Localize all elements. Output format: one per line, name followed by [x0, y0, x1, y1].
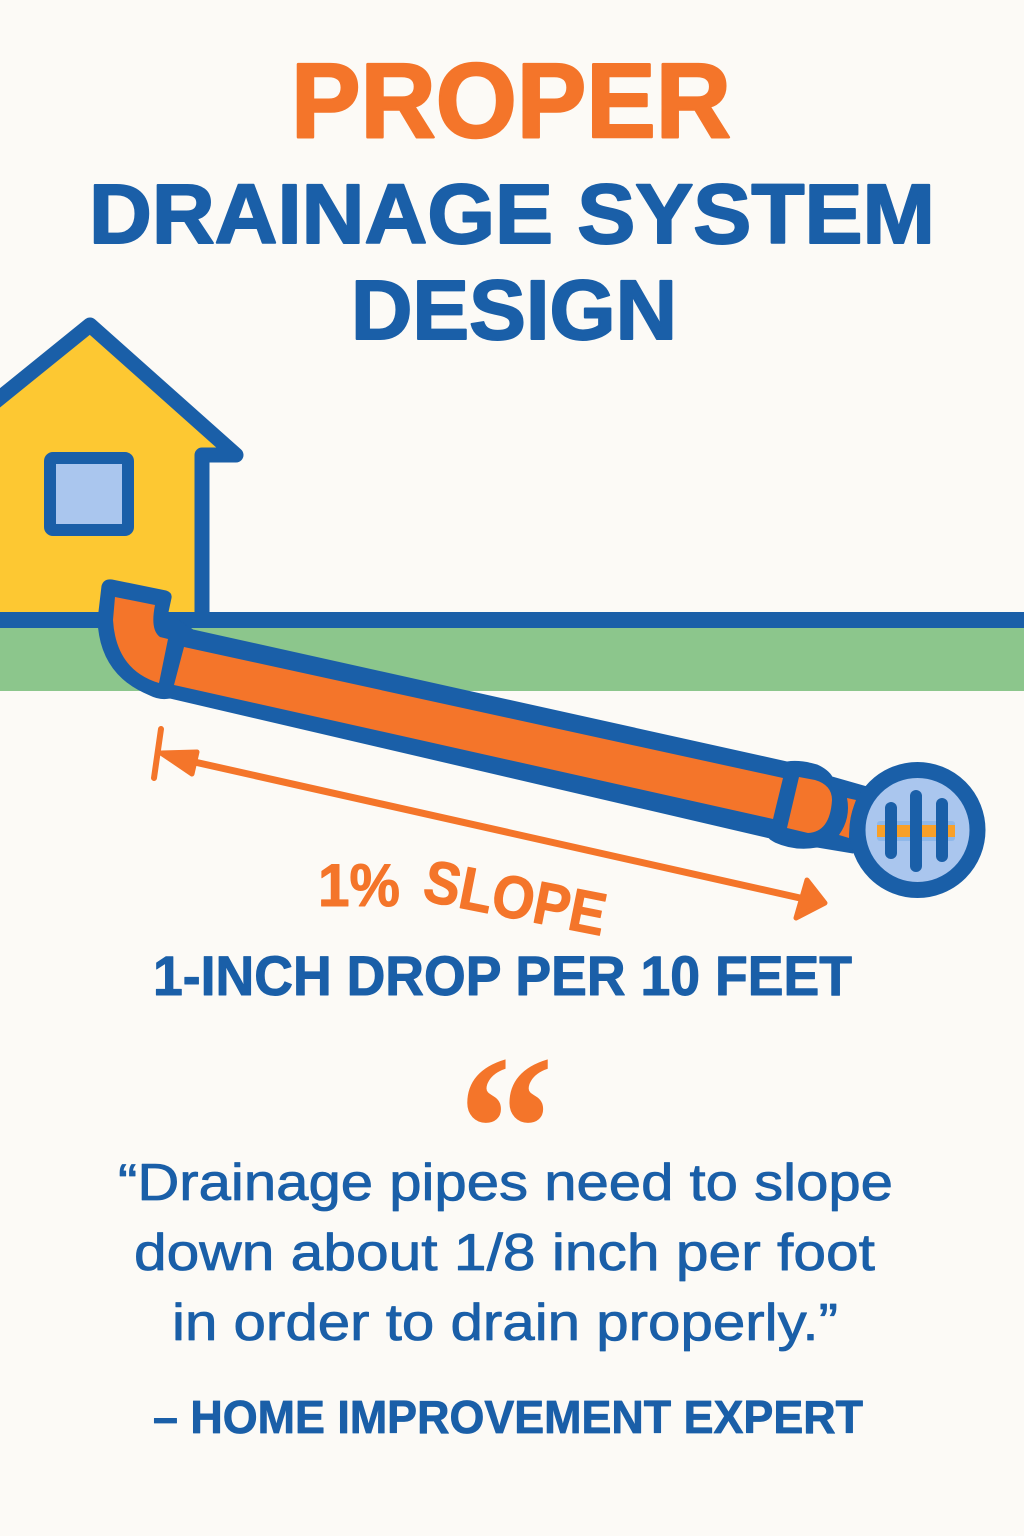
arrow: slope dimension: [154, 729, 825, 918]
left arrowhead: [161, 752, 197, 774]
title line: PROPER: PROPER: [291, 42, 731, 160]
pipe outer outline: [98, 580, 867, 853]
collar orange fill: [787, 777, 832, 833]
quote line 3: in order to drain properly.”: [172, 1294, 838, 1352]
quote text: [118, 1154, 893, 1352]
slope word: SLOPE: [418, 847, 612, 948]
grate slots: [885, 790, 948, 872]
house body and roof: [0, 325, 236, 620]
icon: house: [0, 325, 236, 620]
pipe orange body: [174, 647, 783, 819]
drop label: 1-INCH DROP PER 10 FEET: [153, 944, 852, 1007]
title line: DRAINAGE SYSTEM: DRAINAGE SYSTEM: [89, 167, 935, 261]
right arrowhead: [796, 880, 825, 918]
quote line 1: “Drainage pipes need to slope: [118, 1154, 893, 1212]
cross bar halo: [877, 821, 955, 841]
outlet orange sliver: [839, 798, 856, 838]
title: [89, 42, 935, 357]
quote line 2: down about 1/8 inch per foot: [134, 1224, 876, 1282]
elbow orange fill: [113, 597, 168, 683]
green soil band: [0, 628, 1024, 691]
slope percent: 1%: [318, 852, 400, 919]
house window: [50, 458, 128, 530]
grate ring: [858, 770, 978, 890]
end tick: [154, 729, 161, 778]
ground: [0, 612, 1024, 691]
icon: drain grate: [858, 770, 978, 890]
ground line: [0, 612, 1024, 628]
drainage pipe: [98, 580, 867, 853]
icon: quotation mark: “: [458, 1013, 554, 1245]
arrow shaft: [190, 761, 800, 898]
title line: DESIGN: DESIGN: [351, 263, 677, 357]
orange cross bar: [877, 825, 955, 837]
slope label: [318, 847, 612, 948]
attribution: – HOME IMPROVEMENT EXPERT: [153, 1391, 863, 1443]
